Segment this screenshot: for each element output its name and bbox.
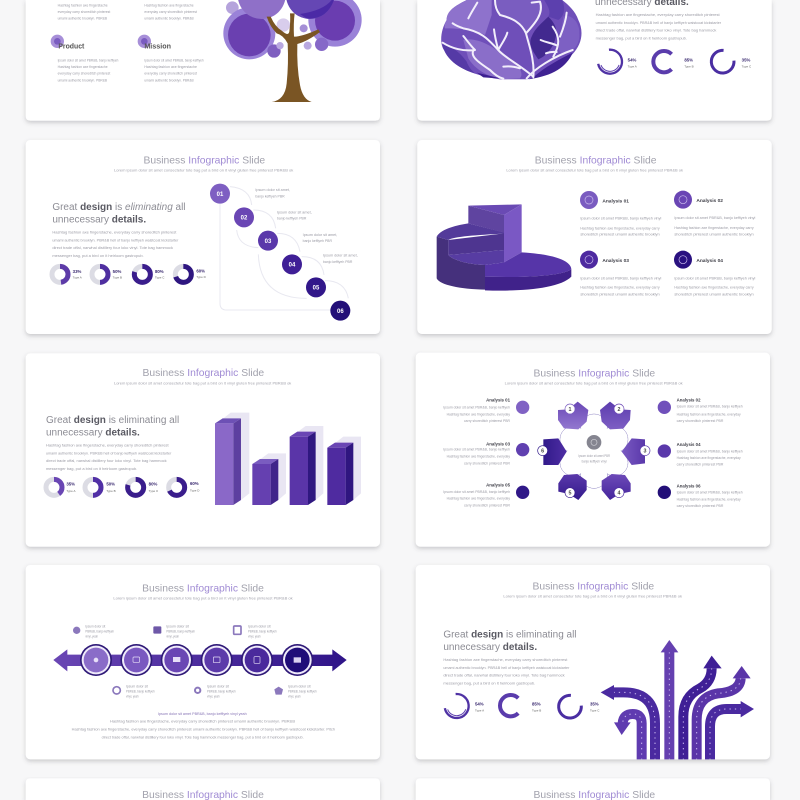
text block: brain description: Hashtag fashion axe fingerstache, everyday carry shoreditch pinterest	[596, 13, 720, 17]
icon: product	[51, 35, 64, 48]
title: Business Infographic Slide	[142, 584, 264, 595]
ring chart: 35%	[558, 694, 582, 719]
step label 01: Ipsum dolor sit amet,	[255, 188, 290, 192]
icon: analysis 02	[658, 401, 671, 414]
heading line 2: unnecessary details.	[443, 642, 537, 653]
label: 35%: Type C	[742, 65, 752, 69]
step label 02: banjo keffiyeh PBR	[277, 217, 307, 221]
analysis 04 text	[674, 258, 756, 296]
analysis 01 text: shoreditch pinterest umami authentic brooklyn	[580, 233, 660, 237]
panel: hexagon cycle slide	[416, 353, 770, 547]
label: 50%: 50%	[106, 482, 115, 487]
analysis 04 text: carry shoreditch pinterest PBR	[677, 463, 724, 467]
label: 85%: 85%	[532, 702, 541, 707]
text block: description: messenger bag, put a bird on it heirloom gastropub.	[443, 681, 535, 685]
arrow: curve up right	[683, 656, 722, 763]
text block: description: Hashtag fashion axe fingerstache, everyday carry shoreditch pinterest	[443, 658, 567, 662]
label: 35%: Type A	[66, 489, 75, 493]
analysis 04 text: Analysis 04	[696, 258, 724, 263]
bar 4	[327, 437, 361, 505]
icon and label: bottom 2: PBR&B, banjo keffiyeh	[207, 689, 236, 693]
analysis 02 text: Analysis 02	[696, 198, 724, 203]
text block: description: messenger bag, put a bird on it heirloom gastropub.	[52, 254, 144, 258]
number 5	[565, 488, 575, 498]
panel: bar chart slide	[26, 353, 380, 547]
label: 33%: Type A	[73, 276, 82, 280]
analysis 04 text: Ipsum dolor sit amet PBR&B, banjo keffiyeh	[677, 449, 743, 453]
text block: product: Hashtag fashion axe fingerstache	[58, 65, 108, 69]
arrow: small left u-turn	[614, 714, 642, 763]
icon and label: top 3: Ipsum dolor sit	[248, 624, 271, 628]
title: Business Infographic Slide	[532, 581, 654, 592]
center text: Ipsum dolor sit amet PBR	[578, 454, 610, 458]
icon: mission	[138, 35, 151, 48]
icon and label: top 1	[73, 624, 114, 638]
step label 04: banjo keffiyeh PBR	[323, 260, 353, 264]
icon: analysis 04	[674, 251, 692, 269]
icon: analysis 04	[658, 444, 671, 458]
text block: mission	[144, 58, 204, 82]
bar 1	[215, 413, 249, 505]
step 01: 01	[217, 192, 224, 198]
text block: brain description	[596, 13, 722, 40]
panel: tree slide	[26, 0, 380, 121]
label: 85%	[684, 57, 694, 69]
analysis 02 text: carry shoreditch pinterest PBR	[677, 419, 724, 423]
arrow: straight up	[661, 640, 678, 763]
icon and label: bottom 2: vinyl, yeah	[207, 694, 220, 698]
text block: mission: everyday carry shoreditch pinterest	[144, 72, 197, 76]
label: 50%: Type B	[106, 489, 116, 493]
label: 60%	[190, 481, 200, 492]
number 3	[640, 446, 650, 456]
donut chart: 33%	[52, 266, 68, 282]
analysis 03 text: Ipsum dolor sit amet PBR&B, banjo keffiyeh vinyl	[580, 276, 662, 280]
heading: mission: Mission	[144, 44, 171, 51]
heading: Great design is eliminating all	[46, 415, 179, 426]
number 4	[614, 488, 624, 498]
label: 60%	[196, 268, 207, 279]
subtitle: Lorem ipsum dolor sit amet consectetur tote bag put a bird on it vinyl gluten free pinterest PBR&B ok	[503, 594, 682, 598]
panel: arrow timeline slide	[26, 565, 380, 759]
analysis 04 text: Analysis 04	[677, 442, 701, 447]
heading line 2: unnecessary details.	[46, 427, 140, 438]
text block: timeline description: direct trade offal, narwhal distillery four loko vinyl. Tote bag hammock messenger bag, put a bird on it heirloom gastropub.	[102, 735, 304, 739]
chart: 3D bars	[215, 413, 361, 505]
analysis 03 text: Analysis 03	[486, 441, 511, 446]
step 01	[210, 184, 230, 204]
label: 85%: 85%	[684, 57, 693, 62]
step 06: 06	[337, 309, 344, 315]
icon and label: top 2: vinyl, yeah	[166, 634, 179, 638]
panel: 3D pie slide	[417, 140, 772, 334]
analysis 02 text: Hashtag fashion axe fingerstache, everyday	[677, 412, 741, 416]
icon: purple brain	[441, 0, 582, 79]
text block: description: messenger bag, put a bird on it heirloom gastropub.	[46, 467, 137, 471]
text block: top left: umami authentic brooklyn. PBR&B	[58, 16, 108, 20]
icon and label: top 2: Ipsum dolor sit	[166, 624, 189, 628]
donut chart: 60%	[169, 479, 185, 495]
text block: description	[46, 443, 172, 471]
icon and label: top 1: Ipsum dolor sit	[85, 624, 105, 628]
donut chart: 35%	[46, 479, 62, 495]
analysis 03 text: carry shoreditch pinterest PBR	[464, 461, 510, 465]
diagram: road arrows	[601, 640, 754, 763]
label: 35%	[66, 482, 75, 493]
timeline node 3	[161, 644, 193, 676]
analysis 03 text	[580, 258, 662, 296]
text block: mission: umami authentic brooklyn. PBR&B	[144, 78, 194, 82]
label: 54%	[628, 57, 637, 69]
number 1	[565, 404, 575, 414]
ring chart: 85%	[649, 47, 679, 77]
analysis 05 text: carry shoreditch pinterest PBR	[464, 503, 510, 507]
icon and label: top 2: PBR&B, banjo keffiyeh	[166, 629, 195, 633]
label: 85%: Type B	[532, 709, 541, 713]
label: 50%: Type B	[113, 276, 122, 280]
number 6: 6	[541, 449, 544, 455]
analysis 02 text: Hashtag fashion axe fingerstache, everyday carry	[674, 226, 754, 230]
analysis 01 text	[443, 398, 511, 423]
step 06	[330, 301, 350, 321]
icon: analysis 06	[658, 486, 671, 499]
panel: bottom right slide (cropped)	[414, 781, 772, 800]
arrow: long curve right	[697, 666, 751, 763]
analysis 05 text: Hashtag fashion axe fingerstache, everyday	[447, 497, 510, 501]
icon: analysis 05	[516, 486, 529, 499]
chart: 3D stepped pie	[437, 204, 571, 291]
icon and label: top 1: vinyl, yeah	[85, 634, 98, 638]
analysis 06 text: carry shoreditch pinterest PBR	[677, 504, 724, 508]
heading: Great design is eliminating all	[443, 630, 577, 641]
label: 80%	[149, 482, 159, 493]
text block: description: Hashtag fashion axe fingerstache, everyday carry shoreditch pinterest	[52, 230, 176, 234]
step label 01	[255, 188, 290, 198]
analysis 03 text	[443, 441, 511, 465]
step label 03: banjo keffiyeh PBR	[303, 239, 332, 243]
subtitle: Lorem ipsum dolor sit amet consectetur tote bag put a bird on it vinyl gluten free pinterest PBR&B ok	[114, 168, 294, 172]
analysis 01 text: Ipsum dolor sit amet PBR&B, banjo keffiyeh	[443, 406, 510, 410]
label: 35%: 35%	[742, 57, 750, 62]
icon and label: bottom 2: Ipsum dolor sit	[207, 684, 229, 688]
step label 02: Ipsum dolor sit amet,	[277, 210, 312, 214]
text block: top left: Hashtag fashion axe fingerstache	[58, 3, 108, 7]
label: 33%: 33%	[73, 269, 81, 274]
analysis 03 text: Hashtag fashion axe fingerstache, everyday carry	[580, 286, 660, 290]
bar 3	[290, 426, 323, 505]
text block: product: umami authentic brooklyn. PBR&B	[58, 78, 108, 82]
icon: analysis 03	[580, 251, 598, 269]
analysis 03 text: Hashtag fashion axe fingerstache, everyday	[447, 455, 510, 459]
text block: product	[58, 58, 118, 82]
label: 80%: Type C	[155, 276, 165, 280]
icon and label: top 3: vinyl, yeah	[248, 634, 261, 638]
label: 54%: Type A	[475, 709, 484, 713]
donut chart: 50%	[92, 266, 108, 282]
analysis 04 text: Ipsum dolor sit amet PBR&B, banjo keffiyeh vinyl	[674, 276, 756, 280]
subtitle: Lorem ipsum dolor sit amet consectetur tote bag put a bird on it vinyl gluten free pinterest PBR&B ok	[506, 168, 683, 172]
ring chart: 54%	[444, 693, 470, 719]
title: Business Infographic Slide	[535, 155, 657, 166]
icon: analysis 01	[516, 401, 529, 414]
analysis 03 text: Analysis 03	[602, 258, 630, 263]
icon and label: bottom 1: PBR&B, banjo keffiyeh	[126, 689, 155, 693]
label: 54%: Type A	[628, 65, 637, 69]
analysis 04 text: shoreditch pinterest umami authentic brooklyn	[674, 292, 754, 296]
analysis 02 text: Ipsum dolor sit amet PBR&B, banjo keffiyeh vinyl	[674, 216, 756, 220]
arrow: double-headed band	[53, 649, 347, 671]
donut chart: 60%	[175, 266, 191, 282]
step label 03: Ipsum dolor sit amet,	[303, 233, 337, 237]
panel: road arrows slide	[416, 565, 770, 763]
panel: brain slide	[417, 0, 772, 121]
icon: analysis 02	[674, 191, 692, 209]
label: 60%: Type D	[196, 275, 207, 279]
text block: description: direct trade offal, narwhal distillery four loko vinyl. Tote bag hammock	[443, 674, 565, 678]
analysis 01 text	[580, 199, 662, 237]
text block: timeline description: Hashtag fashion axe fingerstache, everyday carry shoreditch pinterest umami authentic brooklyn. PBR&B	[110, 720, 296, 724]
step 03	[258, 231, 278, 251]
analysis 05 text: Analysis 05	[486, 483, 511, 488]
heading: product: Product	[58, 44, 85, 51]
icon: analysis 03	[516, 443, 529, 456]
label: 54%: 54%	[475, 702, 484, 707]
analysis 06 text	[677, 483, 743, 508]
icon and label: bottom 1: vinyl, yeah	[126, 694, 139, 698]
label: 35%: 35%	[590, 702, 599, 707]
title: Business Infographic Slide	[533, 368, 655, 379]
step 04: 04	[289, 263, 296, 269]
analysis 03 text: Ipsum dolor sit amet PBR&B, banjo keffiyeh	[443, 448, 510, 452]
label: 80%: 80%	[149, 482, 157, 487]
analysis 02 text	[677, 398, 743, 423]
label: 54%: 54%	[628, 57, 636, 62]
text block: mission: Hashtag fashion axe fingerstache	[144, 65, 197, 69]
step label 02	[277, 210, 312, 221]
arrow: large left	[601, 685, 655, 763]
label: 35%: Type C	[590, 709, 600, 713]
heading: Great design is eliminating all	[52, 202, 186, 213]
text block: description: umami authentic brooklyn. PBR&B hell of banjo keffiyeh waistcoat kickstarter	[443, 666, 570, 670]
label: 80%	[155, 269, 165, 280]
bar 2	[252, 453, 286, 505]
ring chart: 85%	[496, 691, 526, 721]
text block: product: everyday carry shoreditch pinterest	[58, 72, 110, 76]
icon and label: top 1: PBR&B, banjo keffiyeh	[85, 629, 114, 633]
analysis 01 text: Hashtag fashion axe fingerstache, everyday carry	[580, 226, 660, 230]
label: 85%: Type B	[684, 65, 694, 69]
analysis 06 text: Ipsum dolor sit amet PBR&B, banjo keffiyeh	[677, 491, 743, 495]
label: 80%: Type C	[149, 489, 159, 493]
icon and label: bottom 1	[113, 684, 155, 698]
label: 50%	[106, 482, 116, 493]
icon and label: bottom 3	[274, 684, 317, 698]
text block: mission: Ipsum dolor sit amet PBR&B, banjo keffiyeh	[144, 58, 204, 62]
donut chart: 50%	[85, 479, 101, 495]
label: 35%: 35%	[66, 482, 75, 487]
text block: timeline description	[72, 712, 335, 739]
icon and label: bottom 3: vinyl, yeah	[288, 694, 301, 698]
number 6	[538, 446, 548, 456]
analysis 01 text: Analysis 01	[486, 398, 511, 403]
number 1: 1	[569, 407, 572, 413]
text block: top left	[58, 3, 110, 20]
center icon	[587, 435, 601, 450]
text block: brain description: umami authentic brooklyn. PBR&B hell of banjo keffiyeh waistcoat kickstarter	[596, 21, 722, 25]
step 05: 05	[313, 286, 320, 292]
ring chart: 54%	[597, 49, 623, 75]
analysis 01 text: Analysis 01	[602, 199, 630, 204]
label: 35%	[742, 57, 752, 69]
text block: description: umami authentic brooklyn. PBR&B hell of banjo keffiyeh waistcoat kickstarter	[52, 238, 179, 242]
timeline node 6	[281, 644, 313, 676]
subtitle: Lorem ipsum dolor sit amet consectetur tote bag put a bird on it vinyl gluten free pinterest PBR&B ok	[113, 597, 293, 601]
text block: top right: everyday carry shoreditch pinterest	[144, 10, 197, 14]
icon and label: top 3: PBR&B, banjo keffiyeh	[248, 629, 277, 633]
analysis 02 text: Analysis 02	[677, 398, 701, 403]
step 04	[282, 254, 302, 274]
step 05	[306, 277, 326, 297]
ring chart: 35%	[710, 49, 735, 74]
analysis 06 text: Hashtag fashion axe fingerstache, everyday	[677, 497, 741, 501]
label: 54%	[475, 702, 484, 713]
text block: description	[52, 230, 179, 258]
subtitle: Lorem ipsum dolor sit amet consectetur tote bag put a bird on it vinyl gluten free pinterest PBR&B ok	[505, 382, 683, 386]
number 2	[614, 404, 624, 414]
label: 85%	[532, 702, 541, 713]
analysis 01 text: Hashtag fashion axe fingerstache, everyday	[447, 412, 510, 416]
analysis 05 text	[443, 483, 511, 507]
analysis 01 text: Ipsum dolor sit amet PBR&B, banjo keffiyeh vinyl	[580, 217, 662, 221]
number 5: 5	[569, 491, 572, 497]
title: Business Infographic Slide	[142, 368, 264, 379]
icon and label: bottom 3: Ipsum dolor sit	[288, 684, 311, 688]
text block: top right: umami authentic brooklyn. PBR&B	[144, 16, 194, 20]
step label 04: Ipsum dolor sit amet,	[323, 254, 358, 258]
text block: timeline description: Hashtag fashion axe fingerstache, everyday carry shoreditch pinterest umami authentic brooklyn. PBR&B hell of banjo keffiyeh waistcoat kickstarter. Pitch	[72, 727, 335, 731]
icon and label: top 3	[234, 624, 277, 638]
analysis 05 text: Ipsum dolor sit amet PBR&B, banjo keffiyeh	[443, 490, 510, 494]
text block: description	[443, 658, 570, 685]
text block: brain description: direct trade offal, narwhal distillery four loko vinyl. Tote bag hammock	[596, 29, 717, 33]
analysis 04 text	[677, 442, 743, 467]
panel: steps slide	[26, 140, 380, 334]
text block: description: direct trade offal, narwhal distillery four loko vinyl. Tote bag hammock	[46, 459, 167, 463]
donut chart: 80%	[134, 266, 150, 282]
step 03: 03	[265, 239, 272, 245]
text block: timeline description: Ipsum dolor sit amet PBR&B, banjo keffiyeh vinyl yeah	[158, 712, 247, 716]
icon and label: bottom 2	[194, 684, 236, 698]
text block: description: direct trade offal, narwhal distillery four loko vinyl. Tote bag hammock	[52, 246, 173, 250]
step label 03	[303, 233, 337, 243]
label: 35%	[590, 702, 600, 713]
analysis 02 text: Ipsum dolor sit amet PBR&B, banjo keffiyeh	[677, 405, 743, 409]
icon and label: bottom 1: Ipsum dolor sit	[126, 684, 148, 688]
analysis 04 text: Hashtag fashion axe fingerstache, everyday	[677, 456, 741, 460]
timeline node 4	[201, 644, 233, 676]
step label 04	[323, 254, 358, 264]
analysis 04 text: Hashtag fashion axe fingerstache, everyday carry	[674, 286, 754, 290]
text block: top left: everyday carry shoreditch pinterest	[58, 10, 110, 14]
subtitle: Lorem ipsum dolor sit amet consectetur tote bag put a bird on it vinyl gluten free pinterest PBR&B ok	[114, 381, 292, 385]
text block: top right: Hashtag fashion axe fingerstache	[144, 3, 194, 7]
analysis 03 text: shoreditch pinterest umami authentic brooklyn	[580, 292, 660, 296]
diagram: six hexagon segments	[543, 402, 645, 500]
label: 33%	[73, 269, 82, 280]
number 4: 4	[618, 491, 621, 497]
text block: description: Hashtag fashion axe fingerstache, everyday carry shoreditch pinterest	[46, 443, 169, 447]
number 3: 3	[644, 449, 647, 455]
connector lines	[220, 187, 348, 310]
analysis 06 text: Analysis 06	[677, 483, 701, 488]
icon and label: bottom 3: PBR&B, banjo keffiyeh	[288, 689, 317, 693]
timeline node 1	[80, 644, 112, 676]
heading line 2: unnecessary details.	[52, 215, 146, 226]
step 02	[234, 207, 254, 227]
donut chart: 80%	[128, 479, 144, 495]
label: 60%: 60%	[190, 481, 199, 486]
icon: purple tree	[223, 0, 362, 102]
label: 50%	[113, 269, 122, 280]
number 2: 2	[618, 407, 621, 413]
panel: bottom left slide (cropped)	[24, 781, 382, 800]
text block: description: umami authentic brooklyn. PBR&B hell of banjo keffiyeh waistcoat kickstarter	[46, 451, 172, 455]
analysis 02 text: shoreditch pinterest umami authentic brooklyn	[674, 232, 754, 236]
label: 60%: Type D	[190, 488, 200, 492]
analysis 01 text: carry shoreditch pinterest PBR	[464, 419, 510, 423]
step label 01: banjo keffiyeh PBR	[255, 194, 285, 198]
label: 80%: 80%	[155, 269, 164, 274]
step 02: 02	[241, 216, 248, 222]
timeline node 5	[241, 644, 273, 676]
icon and label: top 2	[153, 624, 195, 638]
label: 60%: 60%	[196, 268, 205, 273]
center text: banjo keffiyeh vinyl	[582, 459, 607, 463]
text block: brain description: messenger bag, put a bird on it heirloom gastropub.	[596, 36, 687, 40]
icon: analysis 01	[580, 191, 598, 209]
label: 50%: 50%	[113, 269, 121, 274]
text block: top right	[144, 3, 197, 20]
center text	[578, 454, 610, 463]
title: Business Infographic Slide	[143, 155, 265, 166]
timeline node 2	[120, 644, 152, 676]
analysis 02 text	[674, 198, 756, 236]
arrow: turn right	[710, 701, 754, 763]
text block: product: Ipsum dolor sit amet PBR&B, banjo keffiyeh	[58, 58, 118, 62]
